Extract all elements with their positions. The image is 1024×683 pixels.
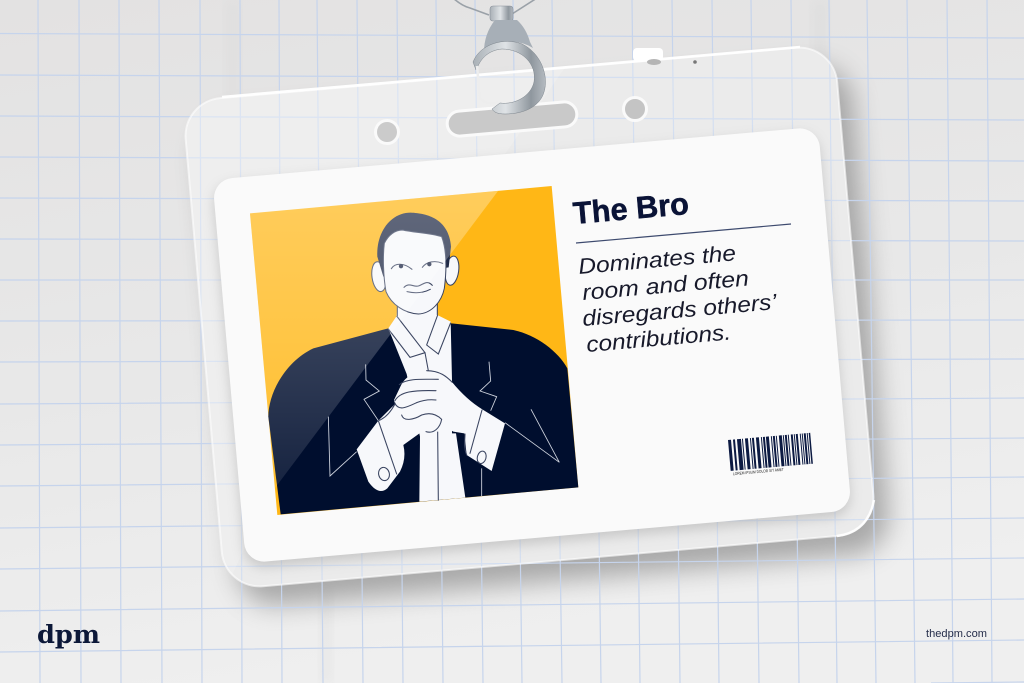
ear right — [443, 255, 461, 286]
holder body — [186, 48, 873, 586]
small tab — [633, 48, 663, 61]
portrait glare — [250, 191, 498, 488]
finger and cuff lines — [378, 371, 482, 474]
slot — [446, 101, 578, 137]
holder rim — [182, 44, 877, 590]
top highlight edge — [222, 47, 800, 97]
tab shadow — [647, 59, 661, 65]
divider — [576, 224, 791, 243]
wires — [453, 0, 537, 15]
card shadow — [212, 132, 852, 569]
description: Dominates the — [577, 240, 737, 279]
metal ring — [473, 41, 545, 114]
ID card — [212, 127, 852, 563]
ear left — [370, 261, 388, 292]
hole left — [376, 120, 398, 144]
clip cylinder — [490, 6, 513, 21]
barcode caption: LOREM IPSUM DOLOR SIT AMET — [733, 467, 784, 476]
shadow under badge holder — [198, 63, 892, 608]
description: disregards others’ — [581, 289, 779, 331]
hands and sleeves — [357, 371, 505, 491]
cuff button left — [377, 466, 391, 482]
ring gate — [477, 66, 498, 103]
collar lines — [388, 297, 451, 501]
description: room and often — [581, 266, 750, 305]
barcode — [728, 433, 813, 476]
brows and mouth — [391, 262, 443, 293]
portrait illustration — [250, 186, 578, 515]
eyes — [399, 262, 431, 268]
logo: dpm — [37, 620, 100, 649]
transparent badge holder — [184, 46, 876, 588]
heading: The Bro — [572, 186, 690, 231]
description — [577, 240, 779, 357]
website: thedpm.com — [926, 628, 987, 640]
dot — [693, 60, 697, 64]
shirt — [388, 295, 465, 502]
bottom right highlight edge — [837, 500, 874, 536]
yellow background — [250, 186, 578, 515]
hole right — [624, 98, 646, 120]
description: contributions. — [585, 319, 732, 357]
jacket — [268, 323, 578, 514]
cuff button right — [476, 450, 487, 465]
jacket lines — [328, 362, 559, 496]
hair — [377, 213, 451, 277]
clip cone — [484, 20, 533, 52]
lanyard clip — [453, 0, 537, 21]
face — [383, 230, 446, 314]
metal clasp ring — [473, 20, 545, 114]
